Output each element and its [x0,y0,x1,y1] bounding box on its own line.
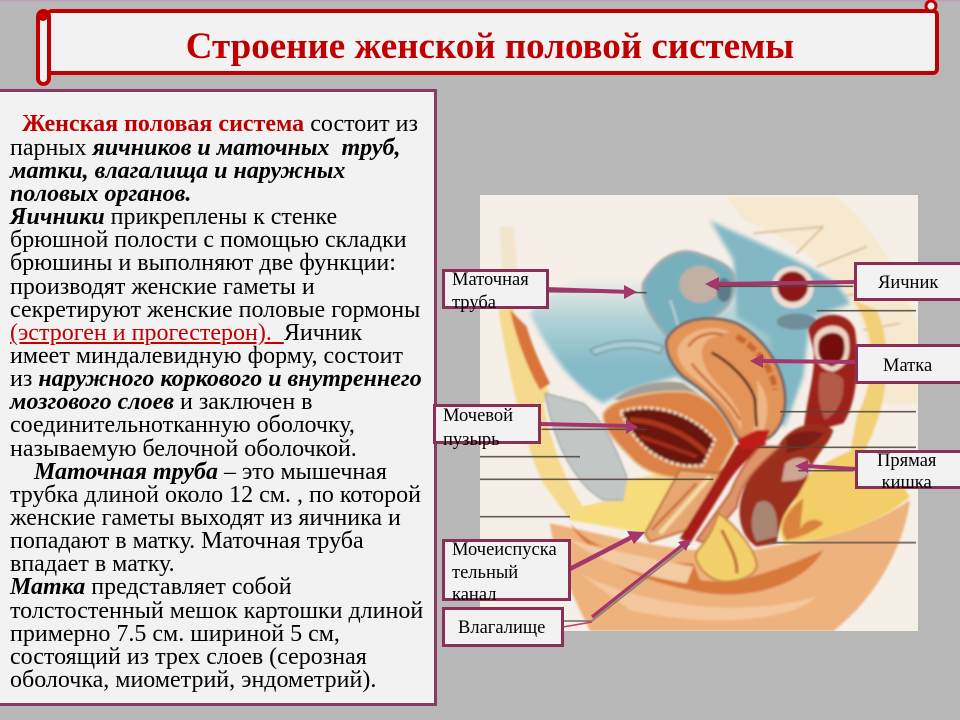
panel: description text: Матка представляет собой [10,574,292,600]
panel: description text: секретируют женские половые гормоны [10,297,420,323]
panel: description text: мозгового слоев и заключен в [10,389,312,415]
label: прямая кишка [855,450,960,489]
arrow: маточная труба [546,285,637,299]
panel: description text: трубка длиной около 12 см. , по которой [10,482,421,508]
panel: description text: парных яичников и маточных труб, [10,135,400,161]
panel: description text: соединительнотканную оболочку, [10,412,355,438]
cut intestine top [771,266,814,309]
rectum lower [740,424,833,547]
body skin lower [550,500,910,631]
panel: description text: имеет миндалевидную форму, состоит [10,343,403,369]
label: влагалище: Влагалище [458,618,545,638]
arrow: мочевой пузырь [540,420,638,434]
title banner [0,0,960,86]
ovary [679,266,721,303]
spine top right [727,197,918,403]
panel: description text [0,89,437,706]
label: матка [855,344,960,384]
panel: description text: называемую белочной оболочкой. [10,436,357,462]
panel: description text: брюшной полости с помощью складки [10,227,407,253]
panel: description text: производят женские гаметы и [10,274,315,300]
rectum upper [803,315,857,433]
yellow fold bottom [696,513,757,581]
label: мочевой пузырь: Мочевой пузырь [443,406,513,450]
panel: description text: впадает в матку. [10,551,175,577]
yellow fat under bladder [570,474,674,534]
panel: description text: Маточная труба – это мышечная [34,459,387,485]
label: мочеиспускательный канал: Мочеиспуска тельный канал [452,540,557,605]
panel: description text: примерно 7.5 см. шириной 5 см, [10,621,340,647]
panel: description text: Женская половая система состоит из [22,111,418,137]
pubic bone [545,393,627,500]
arrow: прямая кишка [795,460,856,473]
panel: description text: толстостенный мешок картошки длиной [10,598,423,624]
panel: description text: Яичники прикреплены к стенке [10,204,337,230]
blue peritoneum [528,282,850,429]
arrow: матка [750,354,856,368]
panel: description text: (эстроген и прогестерон). Яичник [10,320,362,346]
urethra strip [645,463,730,542]
gray over bladder [614,380,702,402]
panel: description text: половых органов. [10,181,191,207]
panel: description text: брюшины и выполняют две функции: [10,250,396,276]
label: яичник [854,262,960,301]
panel: description text: из наружного коркового и внутреннего [10,366,422,392]
label: яичник: Яичник [878,273,938,293]
arrow: мочеиспускательный канал [568,531,645,570]
anatomical illustration [480,195,918,631]
yellow right [780,450,910,543]
left yellow band [497,309,625,521]
bladder [603,391,735,479]
panel: description text: оболочка, миометрий, эндометрий). [10,667,376,693]
panel: description text: матки, влагалища и наружных [10,158,345,184]
orange muscle [510,310,550,390]
vagina [680,438,767,543]
fallopian tube / ovary [643,252,735,347]
label: мочевой пузырь [433,404,541,444]
guide lines [480,286,916,621]
uterus [666,318,785,445]
arrow: яичник [705,277,856,291]
label: маточная труба: Маточная труба [452,270,529,313]
label: маточная труба [442,269,549,309]
title: Строение женской половой системы [186,26,794,67]
panel: description text: женские гаметы выходят из яичника и [10,505,401,531]
label: матка: Матка [883,356,932,376]
panel: description text: попадают в матку. Маточная труба [10,528,364,554]
label: влагалище [442,607,564,647]
label: прямая кишка: Прямая кишка [877,451,936,493]
panel: description text: состоящий из трех слоев (серозная [10,644,367,670]
arrow: влагалище [563,539,691,627]
pale strip upper left [500,226,518,269]
